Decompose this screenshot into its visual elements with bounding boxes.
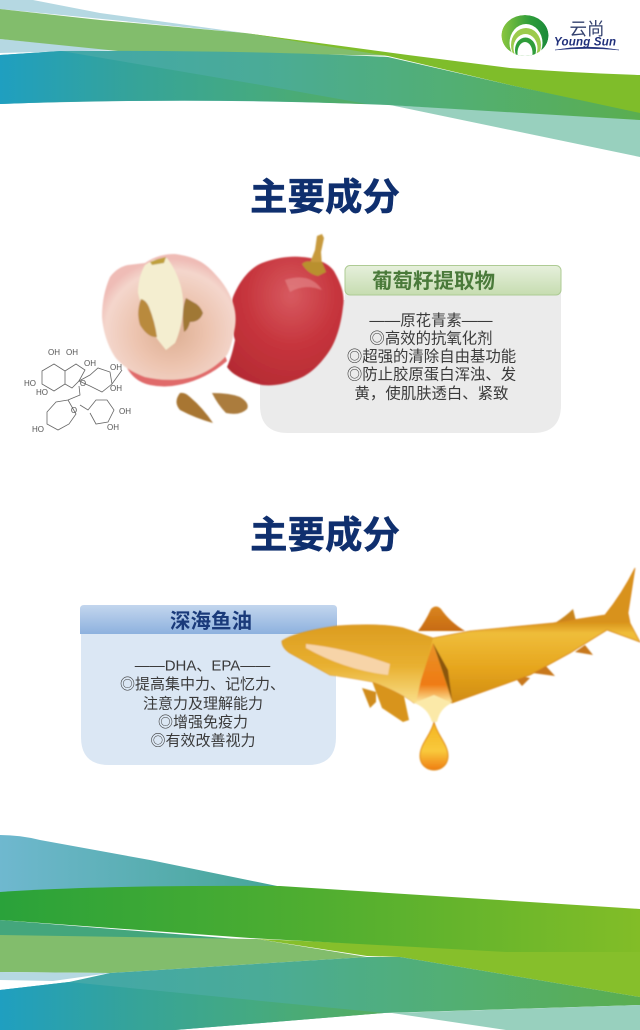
heading: second main ingredients: 主要成分 xyxy=(250,514,400,556)
panel text: ——原花青素—— xyxy=(369,312,493,330)
chart: proanthocyanidin molecule: OH xyxy=(110,384,122,393)
panel text: 注意力及理解能力 xyxy=(143,694,263,712)
panel header: 葡萄籽提取物 xyxy=(372,270,495,293)
oil stream xyxy=(414,695,452,722)
chart: proanthocyanidin molecule: O xyxy=(71,406,77,415)
panel header xyxy=(345,266,561,295)
oil drop xyxy=(420,722,448,770)
shark front body shading xyxy=(282,625,433,703)
logo: Young Sun xyxy=(502,15,619,56)
panel header: 深海鱼油 xyxy=(170,610,252,633)
chart: proanthocyanidin molecule: HO xyxy=(36,388,48,397)
panel body xyxy=(81,625,336,765)
chart: proanthocyanidin molecule: OH xyxy=(84,359,96,368)
panel text: ◎增强免疫力 xyxy=(158,714,248,731)
chart: proanthocyanidin molecule: OH xyxy=(66,348,78,357)
icon: grapes and seeds xyxy=(102,234,344,423)
chart: proanthocyanidin molecule: HO xyxy=(24,379,36,388)
panel text: ◎超强的清除自由基功能 xyxy=(347,348,516,366)
chart: proanthocyanidin molecule: OH xyxy=(110,363,122,372)
logo chinese name: 云尚 xyxy=(570,19,604,39)
panel body xyxy=(260,280,561,433)
chart: proanthocyanidin molecule: OH xyxy=(119,407,131,416)
chart: proanthocyanidin molecule: HO xyxy=(32,425,44,434)
panel: deep sea fish oil xyxy=(80,605,337,765)
logo icon xyxy=(502,15,548,56)
top decorative ribbon band xyxy=(0,0,640,157)
panel text: ◎有效改善视力 xyxy=(150,732,256,750)
panel text xyxy=(120,658,285,750)
logo swoosh xyxy=(555,47,619,50)
panel text: ——DHA、EPA—— xyxy=(135,658,270,674)
shark body xyxy=(282,568,640,703)
grape seeds xyxy=(176,393,248,423)
panel text: ◎提高集中力、记忆力、 xyxy=(120,676,285,693)
heading: first main ingredients: 主要成分 xyxy=(250,176,400,218)
panel text: ◎防止胶原蛋白浑浊、发 xyxy=(347,366,516,384)
logo english name: Young Sun xyxy=(554,36,616,48)
bottom decorative ribbon band xyxy=(0,835,640,1030)
panel: grape seed extract xyxy=(260,266,561,433)
panel text: ◎高效的抗氧化剂 xyxy=(369,330,493,348)
fins xyxy=(418,606,465,631)
shark head highlight xyxy=(306,644,390,675)
chart: proanthocyanidin molecule xyxy=(24,348,131,434)
panel text: 黄，使肌肤透白、紧致 xyxy=(355,384,508,402)
body split wedge xyxy=(416,643,452,702)
halved grape xyxy=(102,254,236,386)
chart: proanthocyanidin molecule: O xyxy=(80,379,86,388)
panel text xyxy=(347,312,516,402)
panel header xyxy=(80,605,337,634)
chart: proanthocyanidin molecule: OH xyxy=(48,348,60,357)
icon: golden shark with oil drop xyxy=(282,568,640,770)
whole red grape xyxy=(227,234,344,385)
chart: proanthocyanidin molecule: OH xyxy=(107,423,119,432)
